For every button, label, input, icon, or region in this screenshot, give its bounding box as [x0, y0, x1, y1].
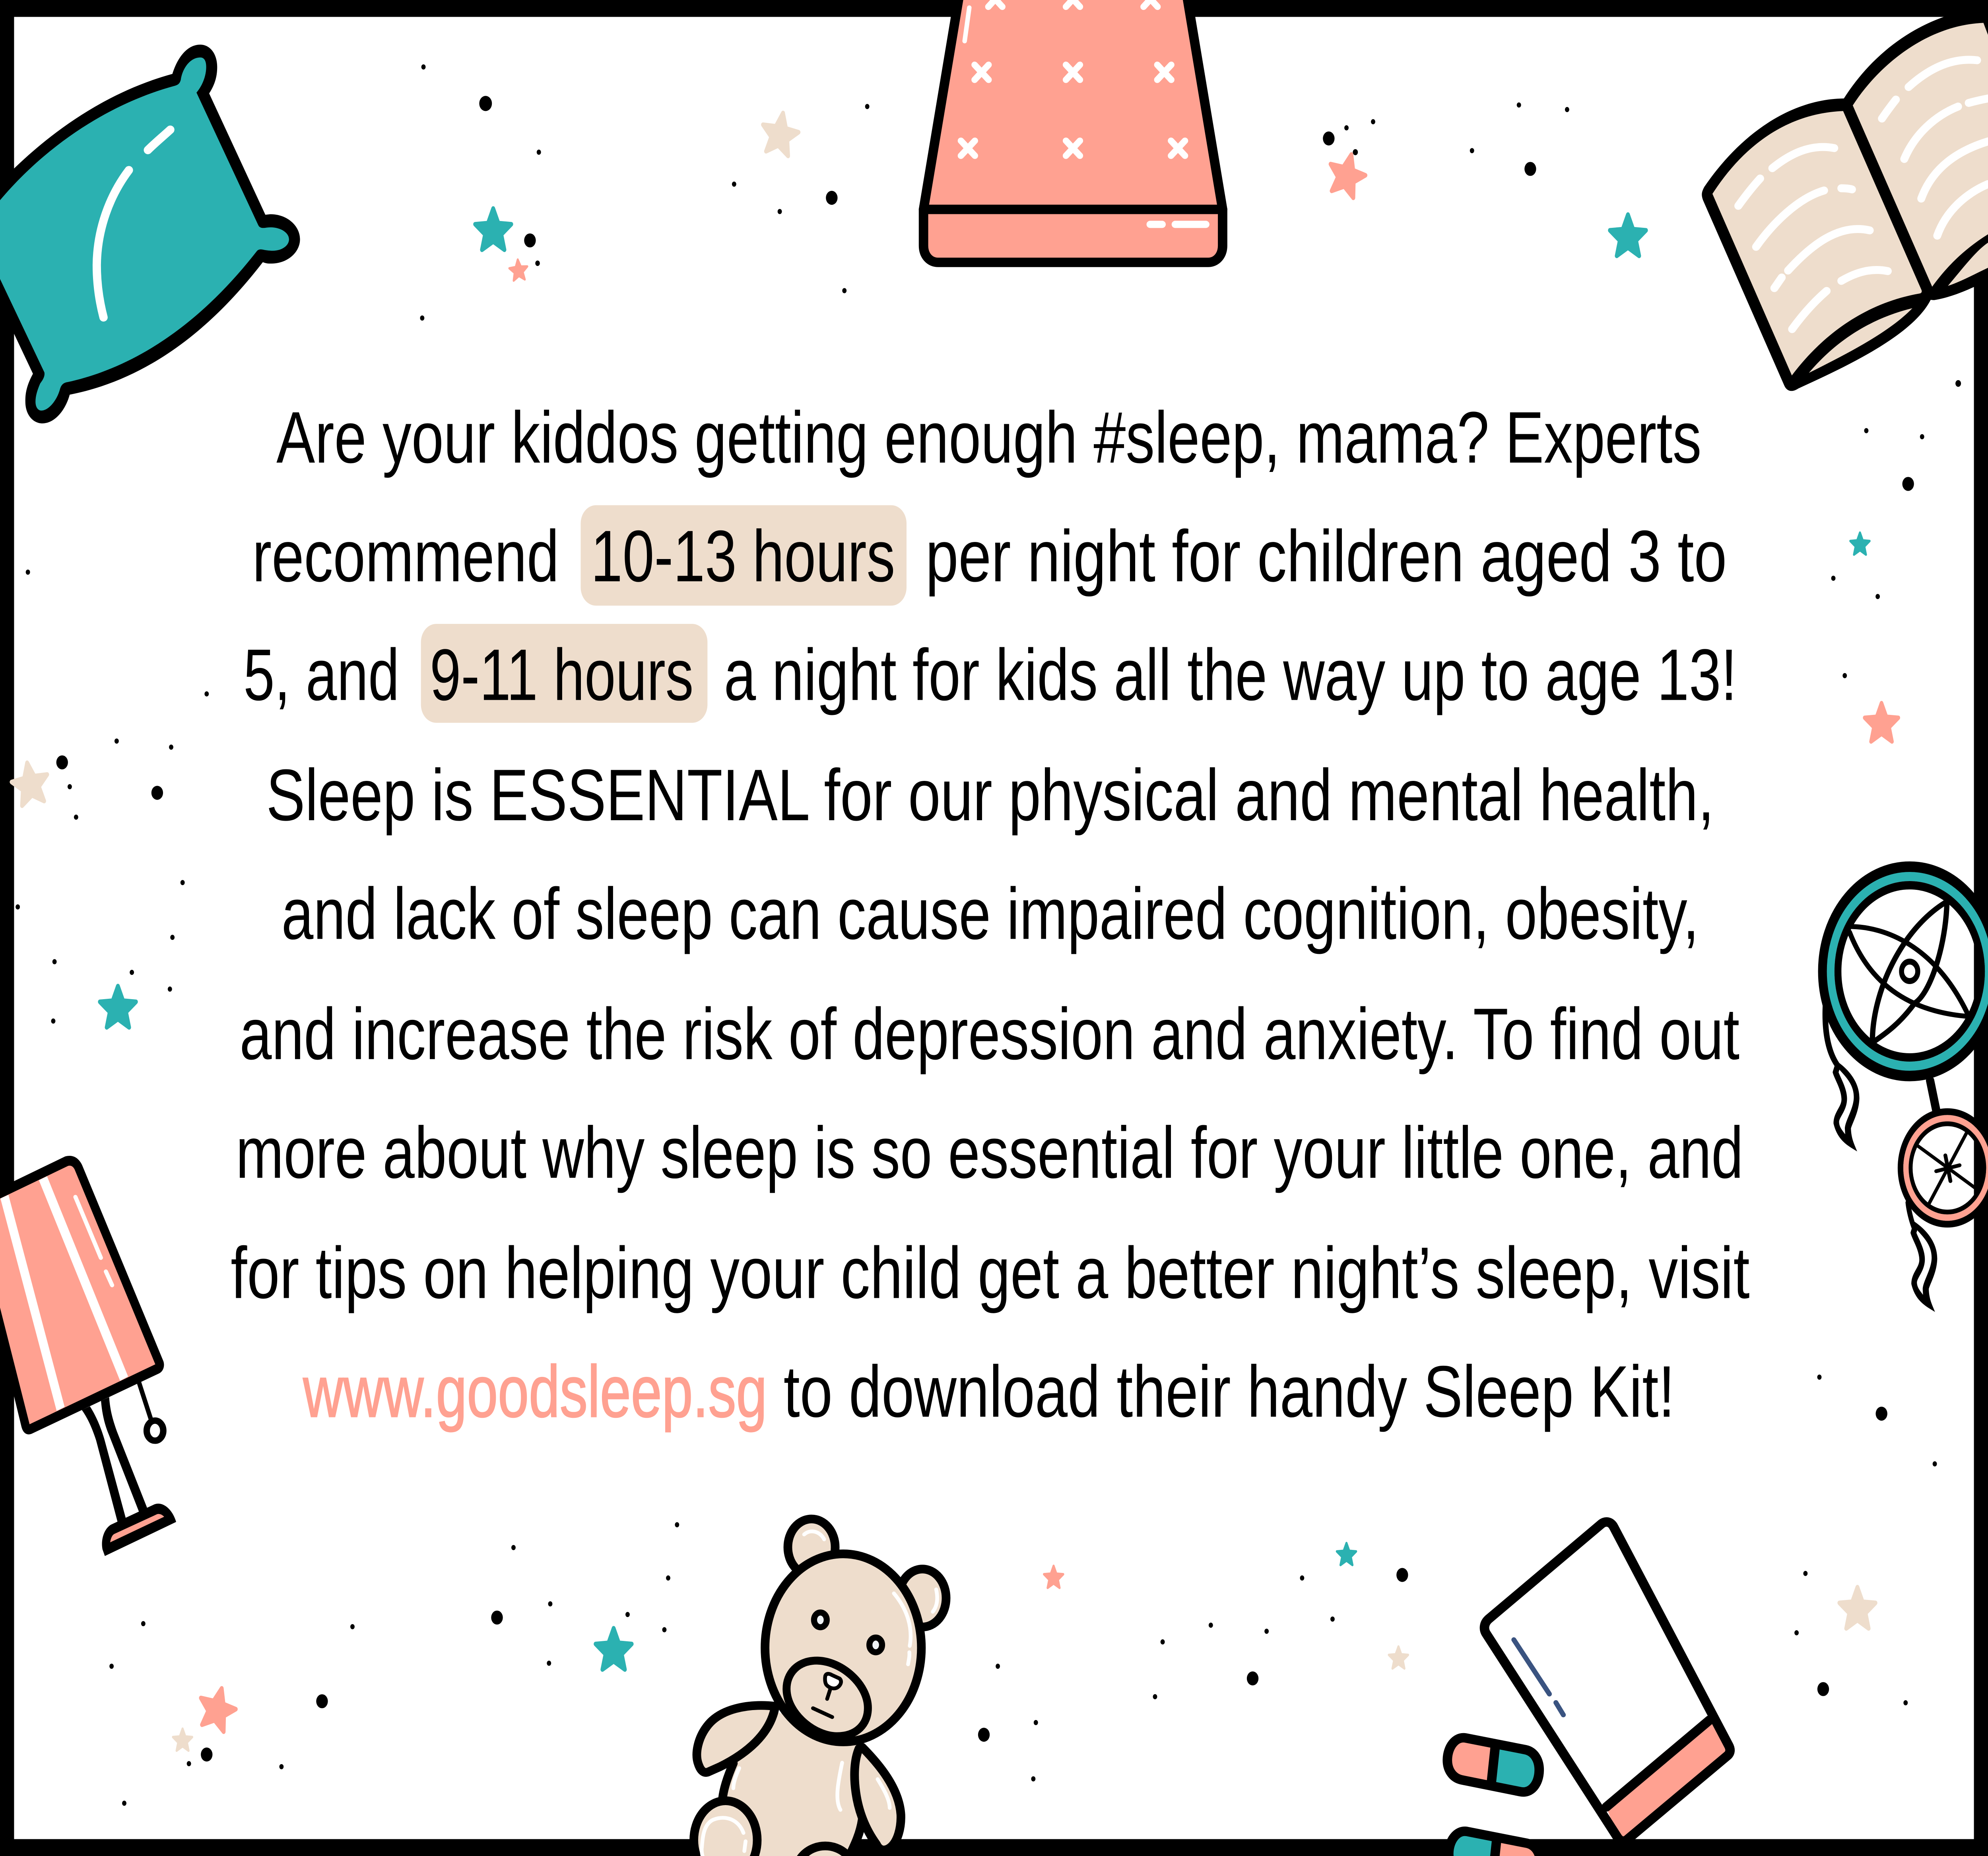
- line 2: 10-13 hours: [591, 515, 895, 597]
- highlight: 9-11 hours: [421, 624, 707, 723]
- line 9: to download their handy Sleep Kit!: [784, 1351, 1675, 1432]
- icon: salmon mattress: [924, 0, 1223, 262]
- icon: notebook and capsules: [1447, 1522, 1730, 1856]
- icon: open book: [1702, 17, 1988, 391]
- line 1: Are your kiddos getting enough #sleep, mama? Experts: [276, 396, 1701, 478]
- line 3: 5, and: [243, 634, 399, 716]
- line 3: [243, 634, 1737, 716]
- icon: dream catcher: [1823, 867, 1988, 1312]
- line 2: recommend: [252, 515, 559, 597]
- line 2: per night for children aged 3 to: [926, 515, 1727, 597]
- line 9: www.goodsleep.sg: [303, 1351, 767, 1432]
- line 3: 9-11 hours: [430, 634, 693, 716]
- line 5: and lack of sleep can cause impaired cognition, obesity,: [282, 873, 1699, 954]
- body text block: [231, 396, 1750, 1432]
- line 3: a night for kids all the way up to age 13!: [724, 634, 1737, 716]
- line 8: for tips on helping your child get a better night’s sleep, visit: [231, 1232, 1750, 1314]
- line 2: [252, 515, 1727, 597]
- icon: teal pillow: [0, 45, 300, 423]
- icon: teddy bear: [694, 1519, 946, 1856]
- line 9: [303, 1351, 1675, 1432]
- line 6: and increase the risk of depression and anxiety. To find out: [240, 993, 1740, 1075]
- line 4: Sleep is ESSENTIAL for our physical and mental health,: [266, 754, 1714, 836]
- line 7: more about why sleep is so essential for your little one, and: [236, 1112, 1743, 1193]
- icon: table lamp: [0, 1156, 176, 1556]
- highlight: 10-13 hours: [580, 505, 907, 606]
